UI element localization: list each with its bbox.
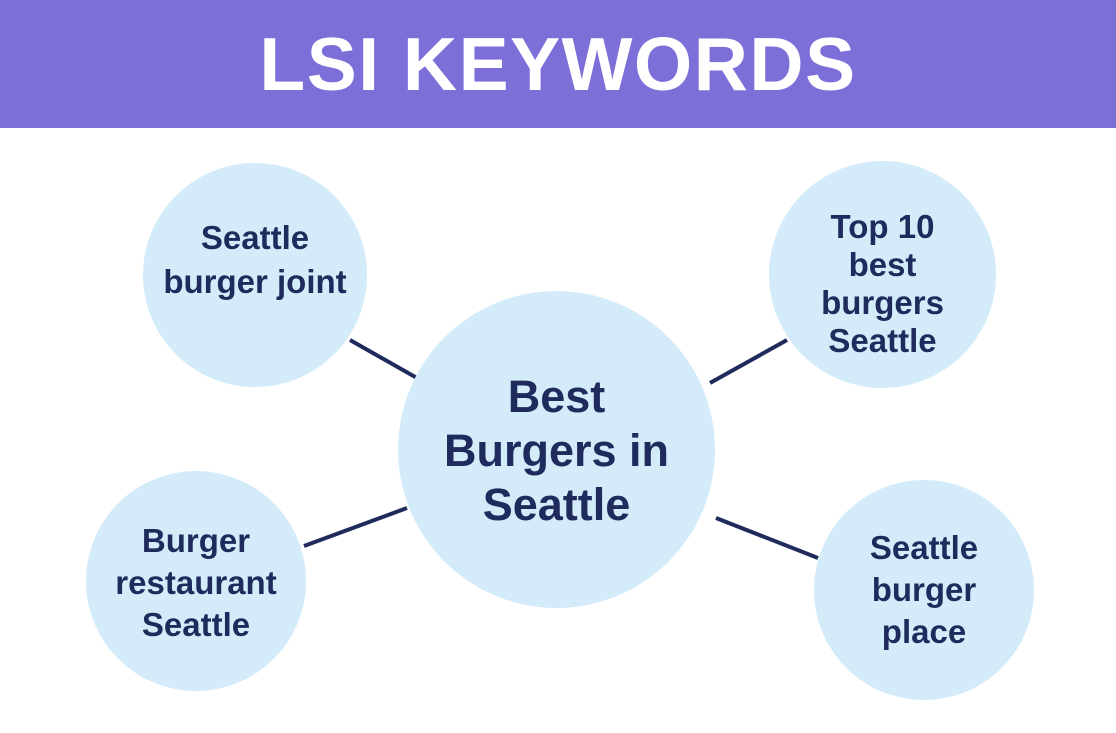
arrow: center to top-right <box>710 340 787 383</box>
circle: Burger restaurant Seattle: Burger <box>142 522 250 559</box>
central circle: Best Burgers in Seattle: Burgers in <box>444 424 669 476</box>
central circle: Best Burgers in Seattle: Seattle <box>483 478 630 530</box>
circle: Seattle burger place <box>814 480 1034 700</box>
circle: Seattle burger joint: burger joint <box>163 263 347 300</box>
title banner <box>0 0 1116 128</box>
circle: Top 10 best burgers Seattle: Top 10 <box>831 208 934 244</box>
circle: Burger restaurant Seattle: restaurant <box>115 564 277 601</box>
circle: Seattle burger place: burger <box>872 571 976 608</box>
arrow: center to bottom-left <box>304 508 407 546</box>
circle: Top 10 best burgers Seattle: Seattle <box>828 322 937 358</box>
title banner: LSI KEYWORDS <box>259 22 857 106</box>
arrow: center to top-left <box>350 340 417 378</box>
circle: Seattle burger place: place <box>882 613 966 650</box>
circle: Seattle burger joint: Seattle <box>201 219 309 256</box>
circle: Top 10 best burgers Seattle <box>769 161 996 388</box>
circle: Top 10 best burgers Seattle: best <box>849 246 916 282</box>
circle: Burger restaurant Seattle <box>86 471 306 691</box>
circle: Burger restaurant Seattle: Seattle <box>142 606 250 643</box>
arrow: center to bottom-right <box>716 518 818 558</box>
circle: Seattle burger joint <box>143 163 367 387</box>
circle: Top 10 best burgers Seattle: burgers <box>821 284 944 320</box>
circle: Seattle burger place: Seattle <box>870 529 978 566</box>
central circle: Best Burgers in Seattle <box>398 291 715 608</box>
central circle: Best Burgers in Seattle: Best <box>508 370 605 422</box>
